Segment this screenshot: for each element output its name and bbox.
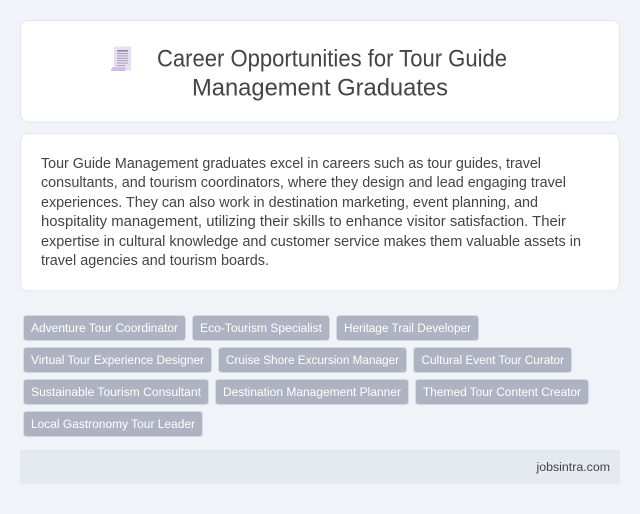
tag: Sustainable Tourism Consultant: Sustainable Tourism Consultant xyxy=(31,385,202,399)
footer text: source: jobsintra.com xyxy=(535,460,610,474)
text block: description: experiences. They can also work in destination marketing, event planning, and xyxy=(41,195,538,211)
tag: Destination Management Planner xyxy=(216,380,408,404)
tag: Cruise Shore Excursion Manager: Cruise Shore Excursion Manager xyxy=(226,353,399,367)
text block: description: hospitality management, utilizing their skills to enhance visitor satisfaction. Their xyxy=(41,214,566,230)
tag list: career roles xyxy=(24,316,588,436)
tag: Cultural Event Tour Curator xyxy=(414,348,572,372)
panel: title card xyxy=(20,20,620,122)
tag: Cruise Shore Excursion Manager xyxy=(218,348,406,372)
panel: description card xyxy=(20,134,620,291)
tag: Themed Tour Content Creator: Themed Tour Content Creator xyxy=(423,385,581,399)
tag: Virtual Tour Experience Designer: Virtual Tour Experience Designer xyxy=(31,353,204,367)
tag: Sustainable Tourism Consultant xyxy=(24,380,208,404)
heading: Management Graduates xyxy=(192,74,448,102)
tag: Themed Tour Content Creator xyxy=(416,380,588,404)
text block: description: travel agencies and tourism boards. xyxy=(41,253,269,269)
tag: Eco-Tourism Specialist: Eco-Tourism Specialist xyxy=(200,321,323,335)
tag: Local Gastronomy Tour Leader xyxy=(24,412,202,436)
tag: Cultural Event Tour Curator: Cultural Event Tour Curator xyxy=(422,353,564,367)
tag: Adventure Tour Coordinator xyxy=(24,316,186,340)
tag: Heritage Trail Developer: Heritage Trail Developer xyxy=(344,321,471,335)
tag: Adventure Tour Coordinator: Adventure Tour Coordinator xyxy=(31,321,178,335)
tag: Heritage Trail Developer xyxy=(336,316,478,340)
heading xyxy=(157,46,507,102)
tag: Local Gastronomy Tour Leader: Local Gastronomy Tour Leader xyxy=(31,417,195,431)
tag: Virtual Tour Experience Designer xyxy=(24,348,212,372)
footer bar xyxy=(20,450,620,484)
tag: Destination Management Planner: Destination Management Planner xyxy=(223,385,401,399)
text block: description: Tour Guide Management graduates excel in careers such as tour guides, travel xyxy=(41,156,541,172)
text block: description: expertise in cultural knowledge and customer service makes them valuable assets in xyxy=(41,234,581,250)
heading: Career Opportunities for Tour Guide xyxy=(157,46,507,72)
tag: Eco-Tourism Specialist xyxy=(192,316,330,340)
text block: description: consultants, and tourism coordinators, where they design and lead engaging travel xyxy=(41,175,566,191)
icon: document scroll xyxy=(111,46,132,71)
text block: description xyxy=(41,156,581,269)
